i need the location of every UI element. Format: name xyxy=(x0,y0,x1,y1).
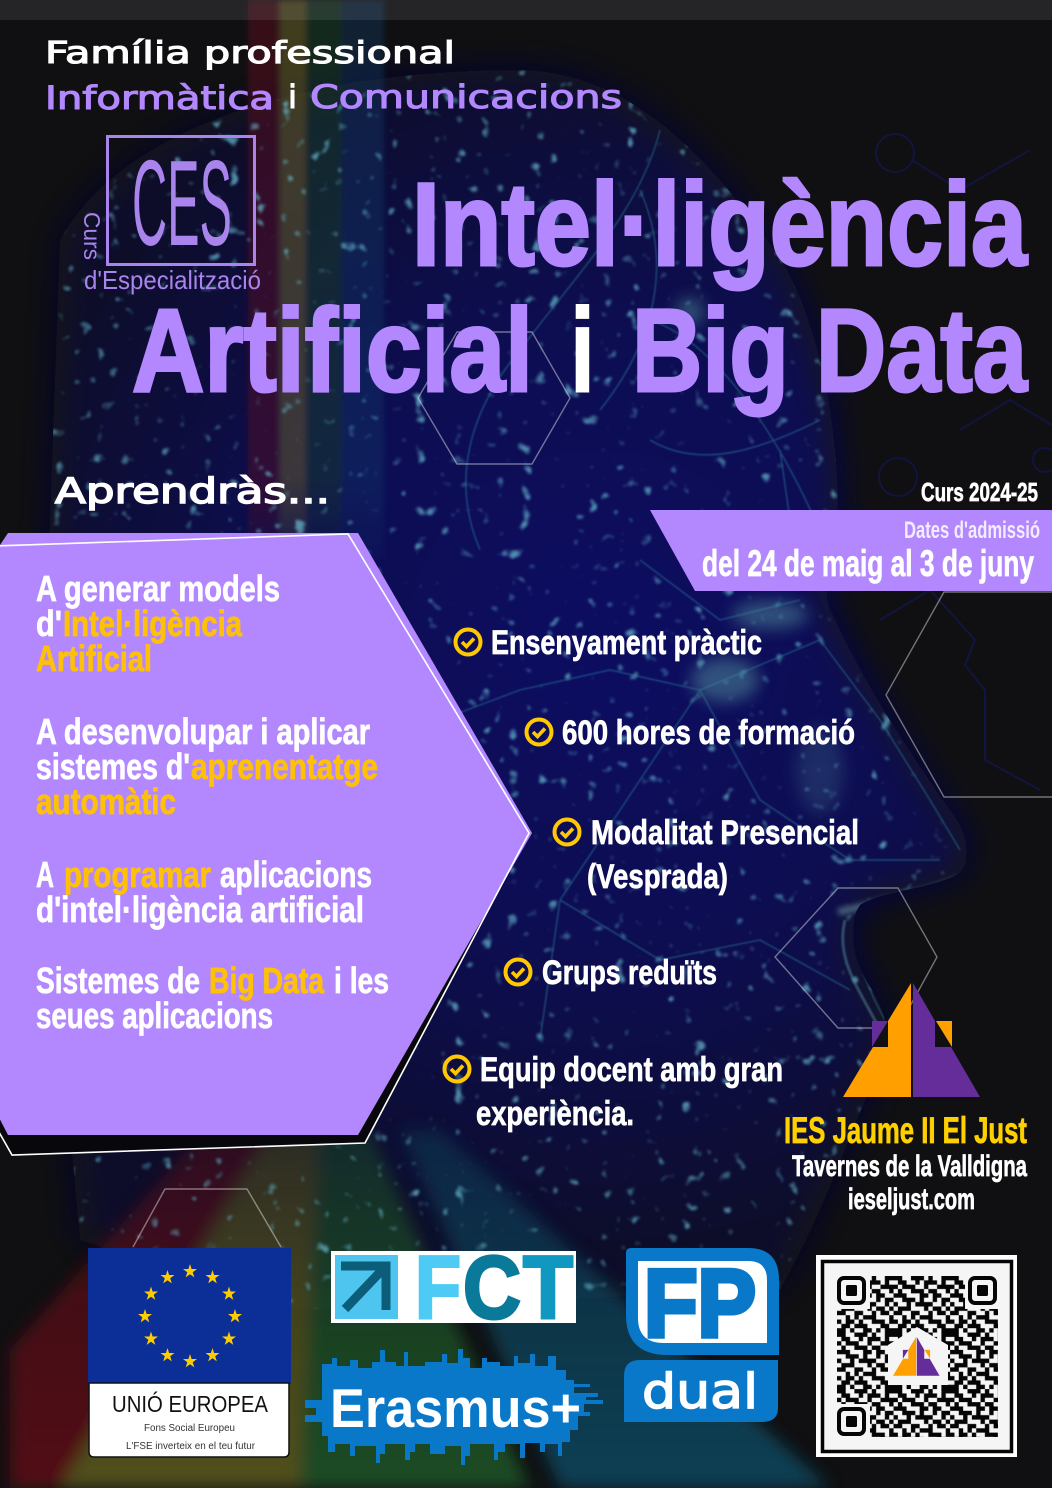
heading: família professional: Informàtica xyxy=(45,79,274,117)
logo: FCT: F xyxy=(415,1237,461,1337)
logo: FP dual: FP xyxy=(644,1250,756,1357)
feature: grups reduïts: Grups reduïts xyxy=(542,954,717,992)
QR finder patterns xyxy=(834,1273,1001,1440)
logo: FP dual: dual xyxy=(642,1364,758,1420)
main title: Artificial xyxy=(132,285,533,417)
hexagon outlines xyxy=(133,332,1052,1247)
admission dates banner xyxy=(650,510,1052,591)
QR centre logo xyxy=(893,1337,940,1376)
school name xyxy=(784,1110,1027,1216)
top strip xyxy=(0,0,1052,20)
main title: i xyxy=(571,285,594,417)
outcome 4: Big Data xyxy=(209,960,325,1001)
main title xyxy=(132,159,1028,417)
outcome 1: A generar models xyxy=(36,568,280,609)
outcome 3: aplicacions xyxy=(220,854,372,895)
logo: european union xyxy=(88,1248,291,1457)
outcome 4: seues aplicacions xyxy=(36,995,273,1036)
heading: família professional: i xyxy=(288,78,297,116)
feature: equip docent xyxy=(444,1051,783,1133)
outcome 2: automàtic xyxy=(36,781,176,822)
feature: equip docent: Equip docent amb gran xyxy=(480,1051,783,1089)
feature: equip docent: experiència. xyxy=(476,1095,634,1133)
network speckle xyxy=(53,70,961,1310)
panel: learning outcomes xyxy=(0,533,532,1155)
outcome 1: Intel·ligència xyxy=(63,603,243,644)
outcome 1: d' xyxy=(36,603,62,644)
logo: FP dual xyxy=(624,1248,779,1422)
outcome 1 xyxy=(36,568,280,679)
feature: modalitat presencial: Modalitat Presencial xyxy=(591,814,859,852)
logo: european union: Fons Social Europeu xyxy=(144,1423,235,1434)
feature: modalitat presencial: (Vesprada) xyxy=(587,858,728,896)
logo: Erasmus+: Erasmus+ xyxy=(330,1377,581,1439)
heading: família professional xyxy=(45,36,622,117)
feature list xyxy=(444,624,859,1133)
feature: modalitat presencial xyxy=(554,814,859,896)
logo: Erasmus+ xyxy=(305,1349,603,1465)
outcome 3 xyxy=(36,854,372,930)
feature: grups reduïts xyxy=(506,954,717,992)
outcome 3: A xyxy=(36,854,54,895)
outcome 4: i les xyxy=(334,960,389,1001)
logo: european union: L'FSE inverteix en el teu futur xyxy=(126,1441,256,1452)
logo: FCT: T xyxy=(523,1237,573,1337)
CES logo: CES xyxy=(132,135,232,271)
CES logo xyxy=(79,135,261,295)
school logo xyxy=(843,983,980,1097)
school name: ieseljust.com xyxy=(848,1183,975,1216)
logo: FCT xyxy=(331,1237,576,1337)
outcome 1: Artificial xyxy=(36,638,152,679)
rainbow vertical bands xyxy=(248,0,384,560)
CES logo: Curs xyxy=(79,212,105,260)
outcome 2 xyxy=(36,711,378,822)
outcome 4: Sistemes de xyxy=(36,960,200,1001)
outcome 2: sistemes d' xyxy=(36,746,190,787)
logo: FCT: C xyxy=(463,1237,521,1337)
outcome 3: programar xyxy=(64,854,211,895)
heading: aprendràs: Aprendràs... xyxy=(55,472,330,512)
feature: ensenyament pràctic: Ensenyament pràctic xyxy=(491,624,762,662)
CES logo: d'Especialització xyxy=(84,265,261,295)
outcome 2: A desenvolupar i aplicar xyxy=(36,711,370,752)
logo: european union: UNIÓ EUROPEA xyxy=(112,1391,269,1417)
rainbow rays xyxy=(10,1130,830,1488)
EU stars xyxy=(138,1264,242,1367)
QR code xyxy=(816,1255,1017,1457)
feature: 600 hores: 600 hores de formació xyxy=(562,714,855,752)
outcome 3: d'intel·ligència artificial xyxy=(36,889,364,930)
heading: família professional: Família professional xyxy=(45,36,455,71)
outcome 4 xyxy=(36,960,389,1036)
outcome 2: aprenentatge xyxy=(191,746,378,787)
heading: família professional: Comunicacions xyxy=(310,78,622,116)
